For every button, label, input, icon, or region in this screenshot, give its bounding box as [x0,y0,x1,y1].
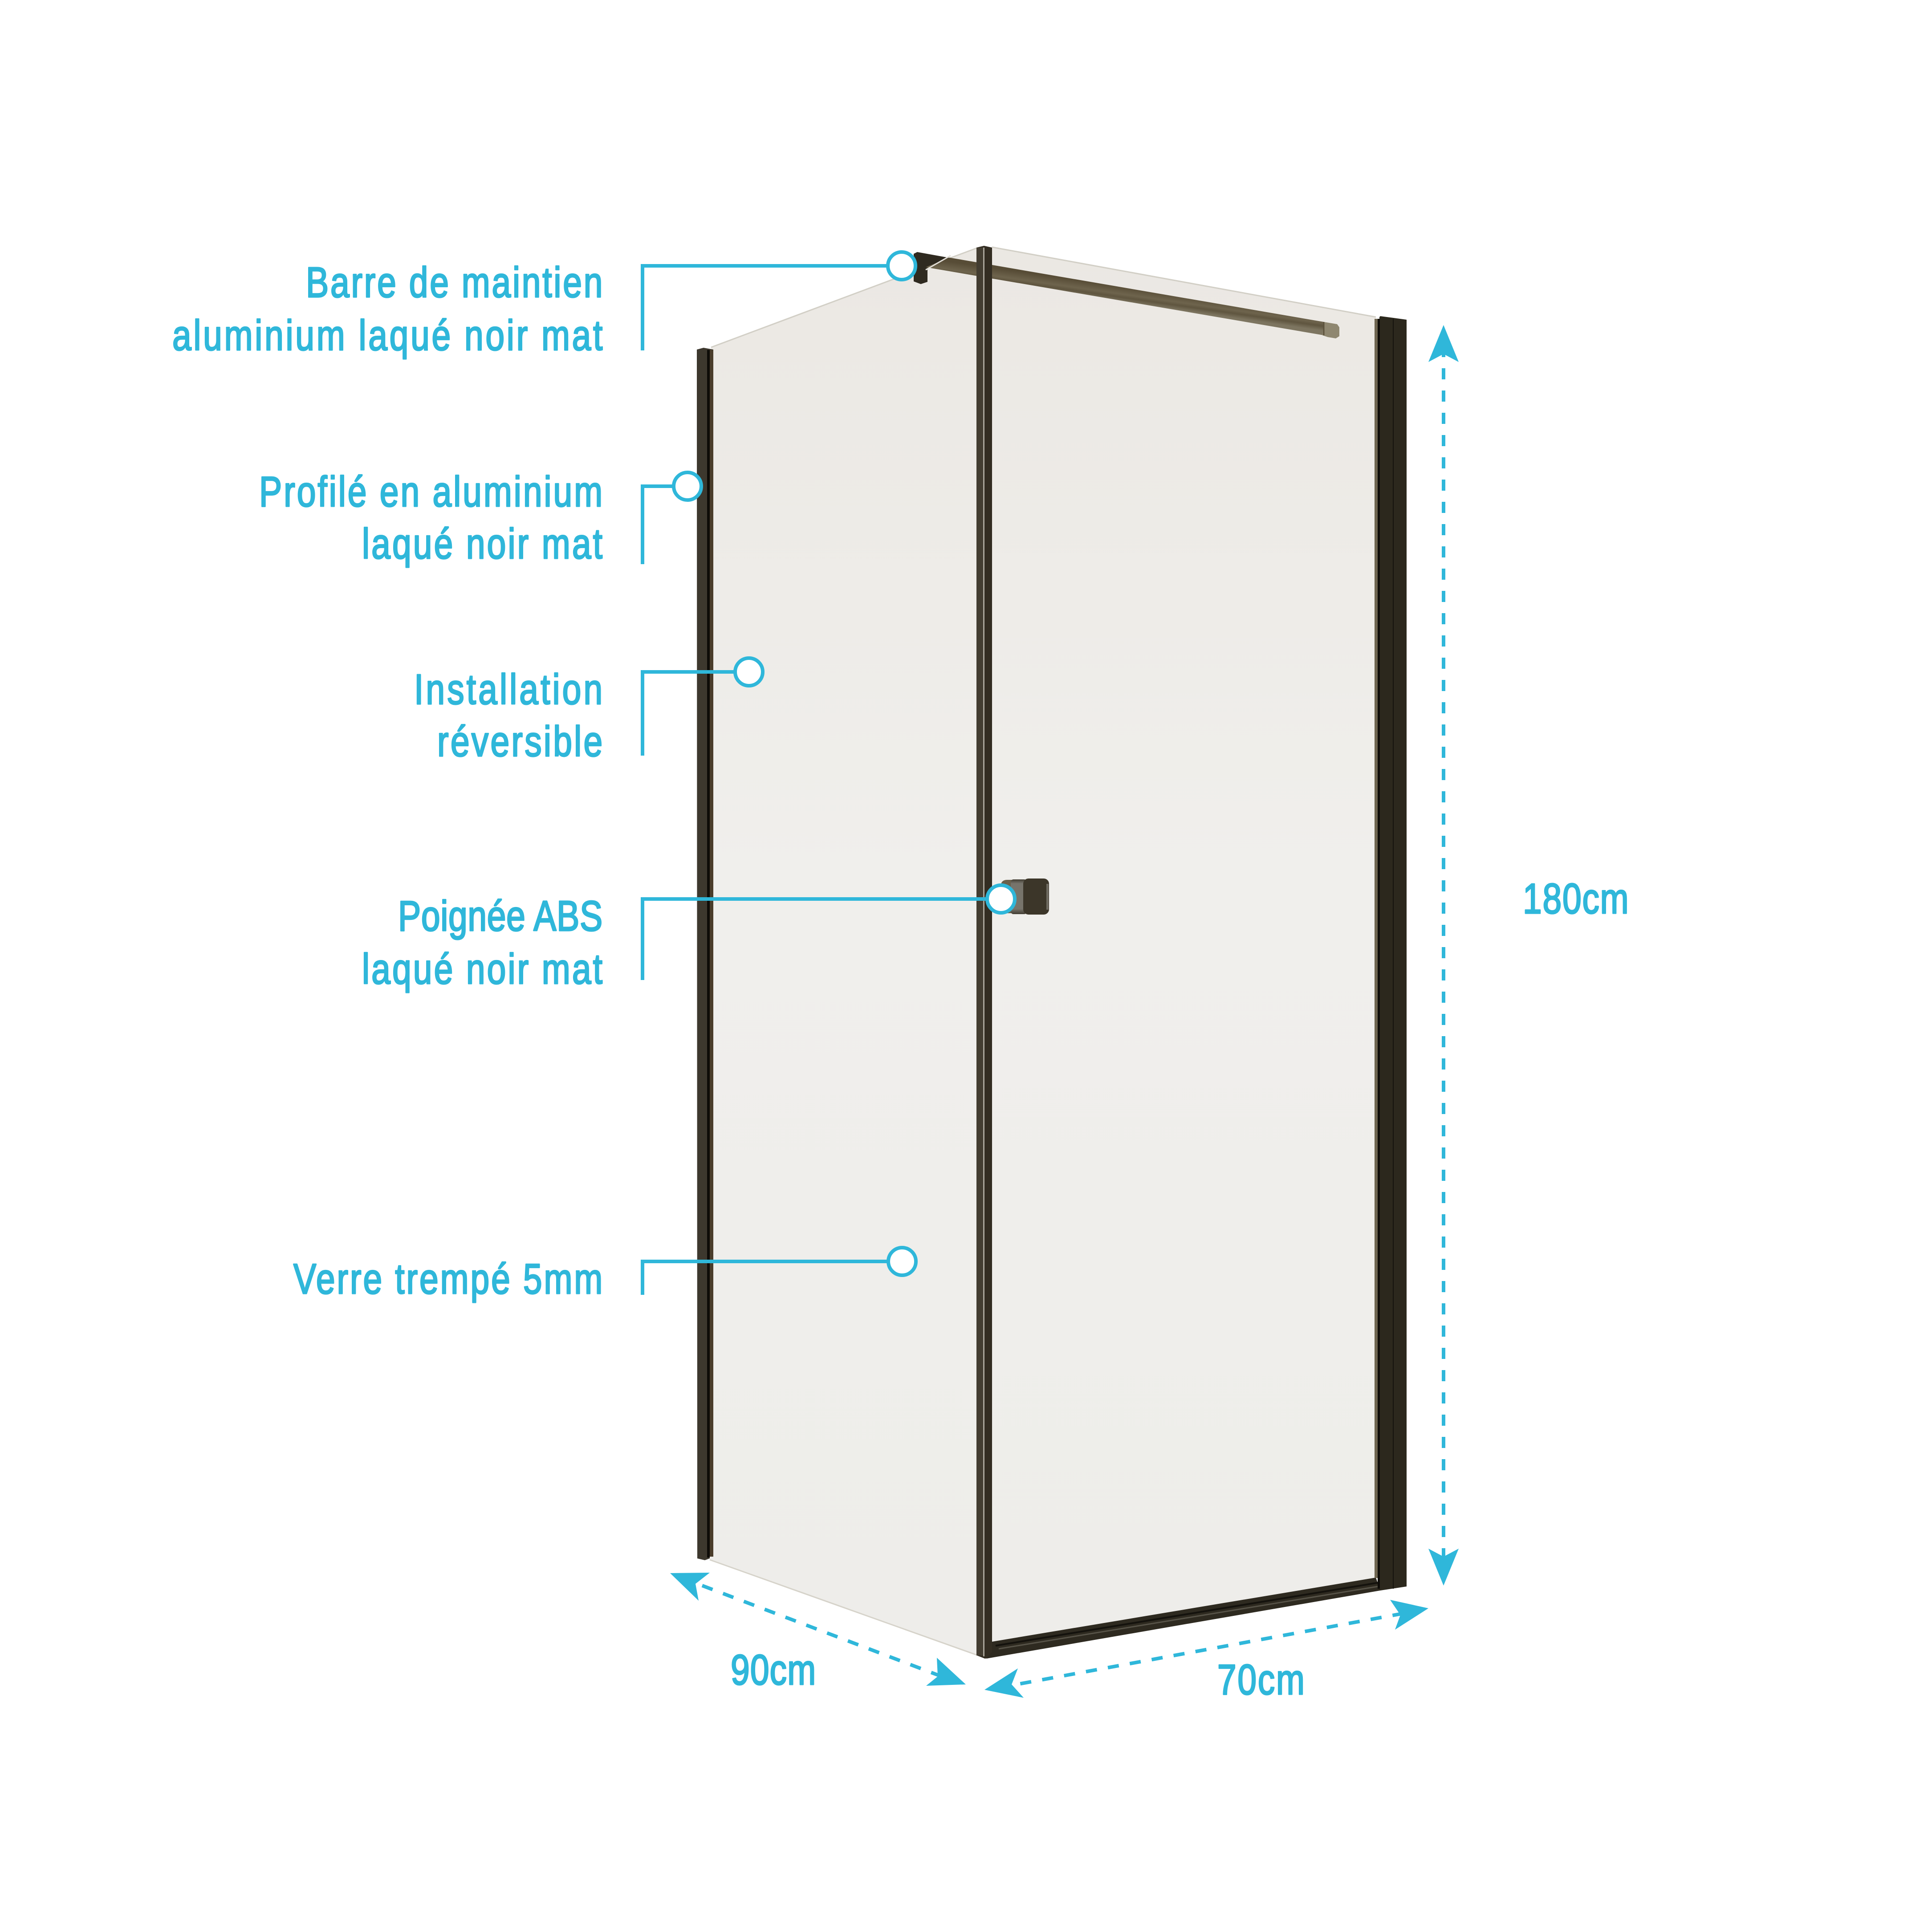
label: 70cm [1217,1656,1305,1704]
label text: aluminium laqué noir mat [172,312,602,359]
marker circle [735,658,763,686]
callout: barre de maintien [172,252,915,359]
dimension: depth 90cm [670,1573,966,1694]
centre door stile [976,246,992,1659]
dimension: width 70cm [984,1600,1428,1704]
label text: Verre trempé 5mm [293,1255,602,1303]
right wall profile [1375,316,1407,1590]
left aluminium profile [697,348,713,1560]
label text [414,666,602,765]
panel: door glass [992,247,1376,1642]
door bottom rail [986,1578,1380,1659]
label: 90cm [731,1646,816,1694]
callout: poignée ABS [362,885,1015,993]
callout: profilé en aluminium [259,468,701,568]
arrow: diagonal dashed double arrow [670,1573,966,1686]
support bar [914,252,1339,338]
callout: installation réversible [414,658,763,765]
panel: left side glass [710,248,977,1655]
label: 180cm [1523,875,1629,923]
leader line [643,899,987,980]
dimension: height 180cm [1428,325,1629,1586]
leader line [643,266,888,350]
door handle [1001,879,1049,915]
label text: laqué noir mat [362,945,602,993]
label text [362,892,602,993]
marker circle [888,1248,916,1275]
leader line [643,486,674,564]
label text: Poignée ABS [398,892,602,940]
label text [259,468,602,568]
arrow: vertical dashed double arrow [1428,325,1459,1586]
leader line [643,1261,888,1295]
label text: réversible [437,718,602,765]
marker circle [674,472,701,500]
label text: laqué noir mat [362,520,602,568]
arrow: diagonal dashed double arrow [984,1600,1428,1698]
label text: Installation [414,666,602,713]
marker circle [987,885,1015,913]
callout: verre trempé [293,1248,916,1303]
label text: Profilé en aluminium [259,468,602,516]
leader line [643,672,735,756]
label text [172,259,602,359]
shower enclosure product illustration [697,246,1407,1659]
label text: Barre de maintien [306,259,602,306]
marker circle [888,252,915,280]
